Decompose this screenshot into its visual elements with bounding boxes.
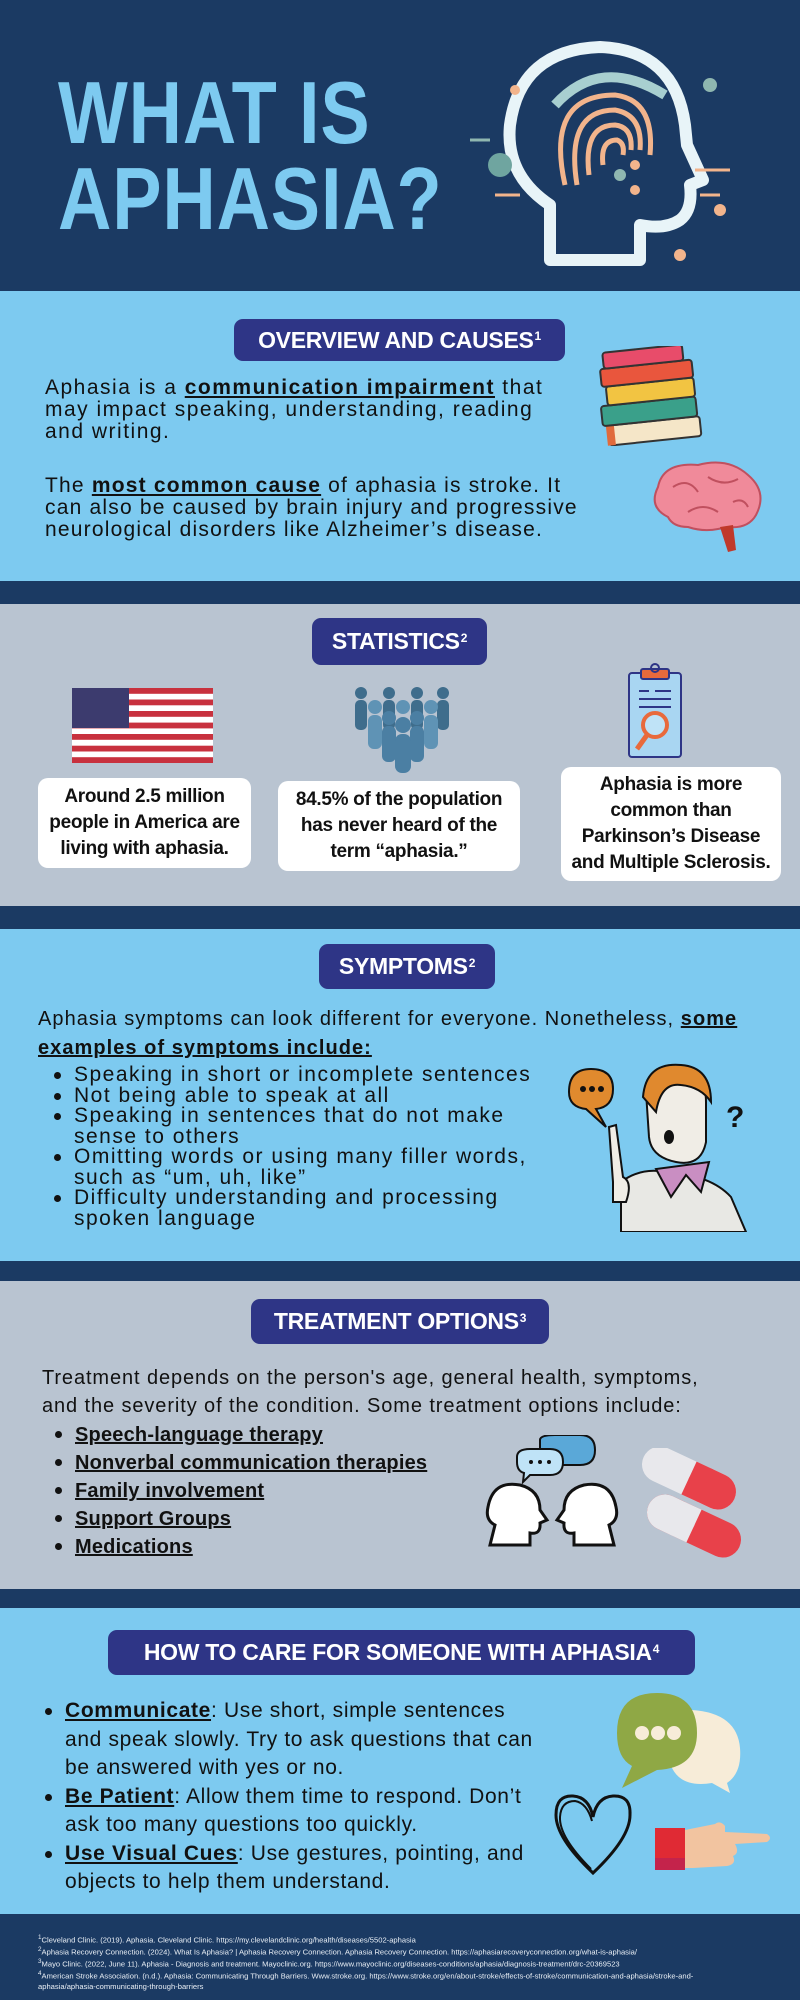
stat box: more common	[561, 767, 781, 881]
list: treatments: Nonverbal communication therapies	[75, 1452, 427, 1474]
icon: head	[470, 41, 730, 266]
list: care tips: Use Visual Cues: Use gestures, pointing, and	[65, 1842, 524, 1864]
text: treatment intro: Treatment depends on the person's age, general health, symptoms,	[42, 1367, 699, 1389]
list: care tips: Communicate: Use short, simple sentences	[65, 1699, 505, 1722]
stat box: more common: common than	[610, 800, 732, 821]
stat box: 84.5%: has never heard of the	[301, 815, 497, 836]
title: WHAT IS	[58, 63, 370, 162]
list: symptoms: sense to others	[74, 1124, 240, 1148]
heading: statistics: 2	[461, 630, 467, 644]
heading: treatment	[251, 1299, 549, 1344]
stat box: 2.5 million: people in America are	[49, 812, 240, 833]
footer: references	[0, 1914, 800, 2000]
heading: symptoms	[319, 944, 495, 989]
icon: confused man	[568, 1064, 747, 1232]
text: symptoms intro	[38, 1008, 738, 1059]
icon: people	[355, 687, 449, 773]
list: treatments: Speech-language therapy	[75, 1424, 323, 1446]
list: care tips: be answered with yes or no.	[65, 1756, 344, 1779]
panel: statistics	[0, 604, 800, 906]
list: symptoms: Omitting words or using many filler words,	[74, 1145, 527, 1168]
heading: overview	[234, 319, 565, 361]
list: treatments: Support Groups	[75, 1508, 231, 1530]
list: symptoms: such as “um, uh, like”	[74, 1166, 307, 1188]
text: definition: may impact speaking, understanding, reading	[45, 398, 533, 421]
title	[58, 63, 443, 248]
list: symptoms	[54, 1063, 531, 1230]
text: definition	[45, 376, 543, 443]
panel: care	[0, 1608, 800, 1914]
heading: symptoms: 2	[469, 956, 475, 970]
text: treatment intro	[42, 1367, 699, 1417]
icon: confused man: ?	[726, 1101, 744, 1134]
stat box: 84.5%	[278, 781, 520, 871]
heading: treatment: 3	[520, 1310, 526, 1324]
list: care tips: and speak slowly. Try to ask questions that can	[65, 1728, 533, 1750]
stat box: 2.5 million: living with aphasia.	[60, 838, 229, 859]
icon: pills	[642, 1448, 741, 1558]
text: definition: and writing.	[45, 420, 170, 443]
list: treatments: Family involvement	[75, 1480, 264, 1502]
list: care tips: objects to help them understand.	[65, 1870, 390, 1893]
icon: brain	[654, 462, 762, 552]
icon: US flag	[72, 688, 213, 763]
footer: references: 1Cleveland Clinic. (2019). Aphasia. Cleveland Clinic. https://my.clevelandclinic.org/health/diseases/5502-aphasia	[38, 1934, 416, 1945]
icon: clipboard	[628, 663, 682, 758]
text: symptoms intro: Aphasia symptoms can look different for everyone. Nonetheless, some	[38, 1008, 737, 1030]
text: causes: can also be caused by brain injury and progressive	[45, 496, 578, 519]
list: treatments: Medications	[75, 1536, 193, 1558]
list: symptoms: Not being able to speak at all	[74, 1084, 390, 1106]
heading: statistics: STATISTICS	[332, 628, 460, 654]
list: treatments	[55, 1424, 428, 1558]
heading: symptoms: SYMPTOMS	[339, 953, 468, 979]
title: APHASIA?	[58, 149, 443, 248]
stat box: 2.5 million: Around 2.5 million	[64, 786, 225, 807]
footer: references: 2Aphasia Recovery Connection. (2024). What Is Aphasia? | Aphasia Recovery Connection. Aphasia Recovery Connection. https://aphasiarecoveryconnection.org/what-is-aphasia/	[38, 1946, 637, 1957]
text: definition: Aphasia is a communication impairment that	[45, 376, 543, 399]
icon: books	[599, 346, 702, 446]
stat box: more common: Aphasia is more	[600, 774, 742, 795]
heading: care: 4	[653, 1642, 659, 1656]
heading: treatment: TREATMENT OPTIONS	[274, 1308, 519, 1334]
heading: care: HOW TO CARE FOR SOMEONE WITH APHASIA	[144, 1639, 652, 1665]
panel: overview	[0, 291, 800, 581]
heading: overview: 1	[535, 329, 541, 343]
footer: references: 4American Stroke Association. (n.d.). Aphasia: Communicating Through Barriers. Www.stroke.org. https://www.stroke.org/en/about-stroke/effects-of-stroke/communication-and-aphasia/stroke-and-	[38, 1970, 693, 1981]
icon: pointing hand	[655, 1822, 770, 1870]
stat box: 84.5%: 84.5% of the population	[296, 789, 502, 810]
icon: speech bubbles	[617, 1693, 740, 1793]
panel: treatment	[0, 1281, 800, 1589]
list: care tips: Be Patient: Allow them time to respond. Don’t	[65, 1784, 521, 1808]
text: symptoms intro: examples of symptoms include:	[38, 1037, 372, 1059]
header	[0, 0, 800, 291]
stat box: more common: Parkinson’s Disease	[582, 826, 760, 847]
list: symptoms: spoken language	[74, 1206, 256, 1230]
list: care tips	[45, 1699, 533, 1893]
text: causes: neurological disorders like Alzheimer’s disease.	[45, 518, 543, 541]
stat box: 2.5 million	[38, 778, 251, 868]
icon: talking heads	[486, 1435, 618, 1546]
heading: care	[108, 1630, 695, 1675]
stat box: 84.5%: term “aphasia.”	[330, 841, 468, 862]
list: care tips: ask too many questions too quickly.	[65, 1813, 418, 1836]
heading: overview: OVERVIEW AND CAUSES	[258, 326, 534, 352]
text: causes	[45, 474, 578, 541]
text: treatment intro: and the severity of the condition. Some treatment options include:	[42, 1395, 682, 1417]
list: symptoms: Speaking in short or incomplete sentences	[74, 1063, 531, 1086]
footer: references: 3Mayo Clinic. (2022, June 11). Aphasia - Diagnosis and treatment. Mayoclinic.org. https://www.mayoclinic.org/diseases-conditions/aphasia/diagnosis-treatment/drc-20369523	[38, 1958, 620, 1969]
list: symptoms: Speaking in sentences that do not make	[74, 1104, 505, 1127]
stat box: more common: and Multiple Sclerosis.	[572, 852, 770, 873]
footer: references: aphasia/aphasia-communicating-through-barriers	[38, 1982, 203, 1990]
icon: heart	[554, 1794, 632, 1876]
text: causes: The most common cause of aphasia is stroke. It	[45, 474, 561, 497]
panel: symptoms	[0, 929, 800, 1261]
heading: statistics	[312, 618, 487, 665]
list: symptoms: Difficulty understanding and processing	[74, 1186, 499, 1209]
